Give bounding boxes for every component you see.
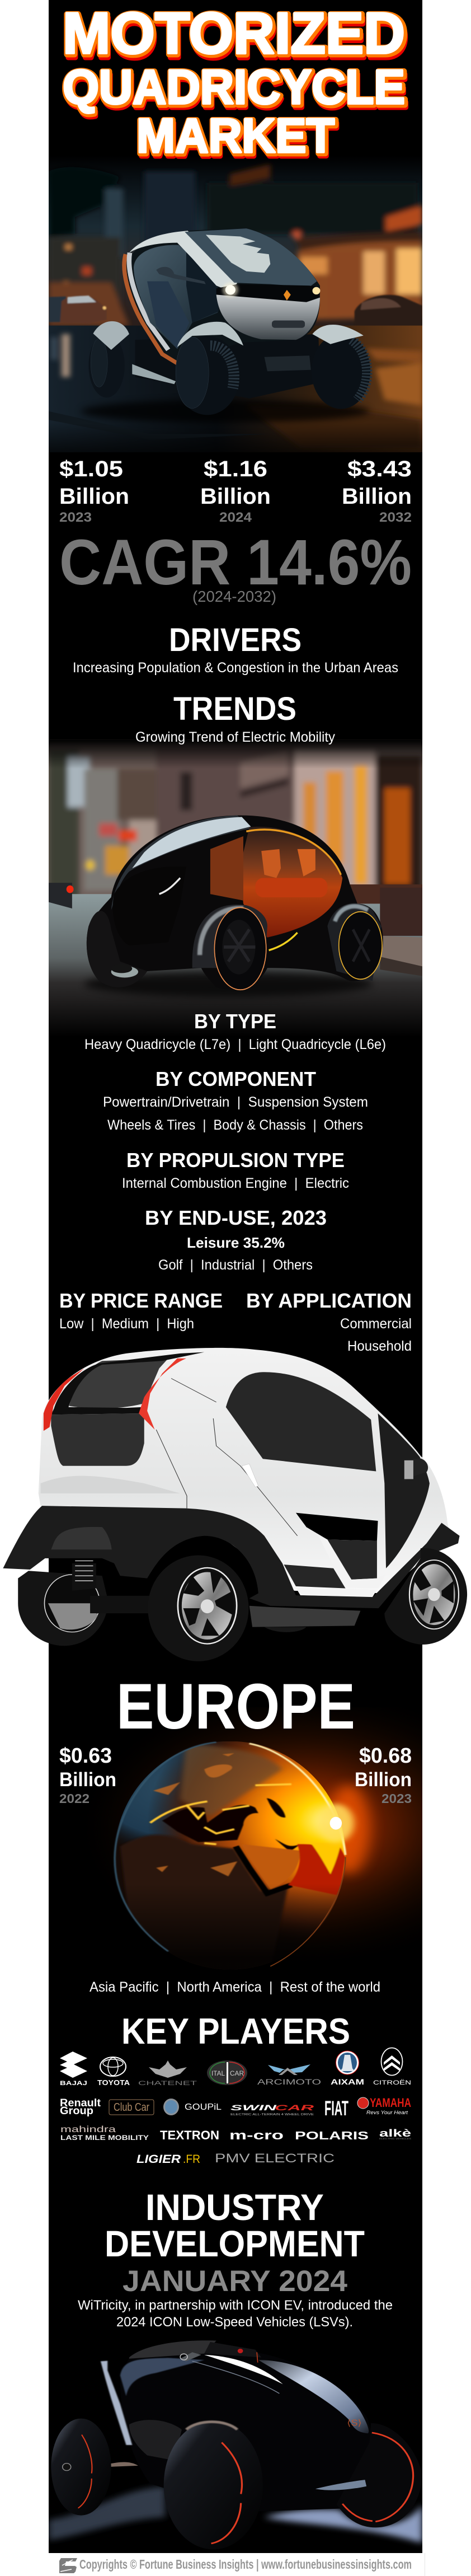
title line: MOTORIZED: MOTORIZED — [63, 1, 405, 66]
logo: Ital Car: ITAL — [211, 2069, 225, 2077]
logo: Ital Car: CAR — [230, 2069, 244, 2077]
stat: 2032 market size: 2032 — [379, 510, 412, 525]
logo: Fiat: FIAT — [324, 2097, 348, 2120]
stat: 2024 market size: Billion — [200, 484, 271, 509]
stat: Europe 2023: 2023 — [381, 1791, 412, 1806]
segment: by type — [84, 1010, 386, 1052]
development description: WiTricity, in partnership with ICON EV, introduced the — [78, 2298, 393, 2313]
stat: Europe 2022: $0.63 — [59, 1744, 112, 1768]
footer — [49, 2553, 425, 2576]
logo: Mahindra Last Mile Mobility: mahindra — [60, 2125, 116, 2134]
heading: leading region Europe: EUROPE — [116, 1671, 355, 1743]
stat: Europe 2023: Billion — [355, 1769, 412, 1791]
logo: Aixam — [331, 2051, 364, 2086]
stat: 2023 market size: Billion — [59, 484, 129, 509]
stat: Europe 2022: 2022 — [59, 1791, 90, 1806]
logo: Club Car: Club Car — [114, 2101, 149, 2114]
image: dark concept vehicle with red wheel rings: ⟨S⟩ — [347, 2418, 362, 2428]
logo: Chatenet — [138, 2060, 197, 2087]
segment: by component — [103, 1067, 368, 1133]
stat: Europe 2023 — [355, 1744, 412, 1806]
logo: Micro: m-cro — [229, 2128, 284, 2142]
logo: Goupil — [163, 2099, 222, 2115]
segment: by price range: BY PRICE RANGE — [59, 1289, 223, 1312]
logo: Alke: alkè — [379, 2128, 411, 2139]
CAGR period: (2024-2032) — [192, 588, 276, 605]
segment: by application — [246, 1289, 412, 1354]
title line: MARKET: MARKET — [138, 113, 337, 167]
logo: Textron: TEXTRON — [160, 2128, 219, 2142]
stat: Europe 2022: Billion — [59, 1769, 116, 1791]
logo: Ligier: .FR — [183, 2153, 200, 2166]
heading: key players: KEY PLAYERS — [121, 2011, 350, 2052]
title line: MARKET: MARKET — [137, 110, 336, 164]
segment: by propulsion type — [122, 1149, 349, 1191]
segment: by end-use: BY END-USE, 2023 — [145, 1206, 327, 1229]
logo: Club Car — [109, 2100, 154, 2115]
logo: Swincar — [230, 2103, 315, 2116]
title line: MARKET: MARKET — [136, 109, 335, 163]
development description — [78, 2298, 393, 2330]
wheels — [87, 911, 147, 987]
logo: Ital Car — [207, 2060, 247, 2085]
logo: Yamaha: YAMAHA — [370, 2096, 411, 2110]
logo: Yamaha: Revs Your Heart — [366, 2110, 408, 2115]
segment: by application: BY APPLICATION — [246, 1289, 412, 1312]
logo: Alke — [379, 2128, 411, 2140]
stat: 2032 market size: Billion — [342, 484, 412, 509]
segment: by propulsion type: BY PROPULSION TYPE — [126, 1149, 345, 1172]
logo: PMV Electric: PMV ELECTRIC — [215, 2151, 335, 2165]
image: dark concept vehicle with red wheel rings — [49, 2340, 422, 2549]
logo: Swincar: SWIN — [230, 2103, 277, 2112]
hero image: quadricycle on rainy night street — [49, 156, 422, 466]
segment: by component: Powertrain/Drivetrain | Suspension System — [103, 1094, 368, 1110]
stat: Europe 2023: $0.68 — [359, 1744, 412, 1768]
segment: by type: Heavy Quadricycle (L7e) | Light Quadricycle (L6e) — [84, 1037, 386, 1052]
stat: 2023 market size — [59, 457, 129, 525]
development date: JANUARY 2024 — [123, 2265, 348, 2298]
logo: Ligier: LIGIER — [136, 2153, 181, 2166]
logo: Polaris: POLARIS — [295, 2130, 369, 2142]
logo: Bajaj — [60, 2052, 87, 2087]
title line: MOTORIZED: MOTORIZED — [63, 2, 407, 67]
other regions: Asia Pacific | North America | Rest of the world — [90, 1979, 380, 1995]
segment: by price range: Low | Medium | High — [59, 1316, 194, 1332]
logo: Bajaj: BAJAJ — [60, 2080, 87, 2087]
heading: trends: TRENDS — [173, 691, 296, 727]
logo: Mahindra Last Mile Mobility — [60, 2125, 149, 2142]
logo: Toyota: TOYOTA — [97, 2078, 130, 2087]
trends text: Growing Trend of Electric Mobility — [135, 729, 335, 745]
key player logos — [60, 2048, 411, 2166]
stat: 2023 market size: 2023 — [59, 510, 92, 525]
icon: Fortune Business Insights logo — [59, 2558, 77, 2573]
stat: 2023 market size: $1.05 — [59, 457, 123, 481]
heading: drivers: DRIVERS — [169, 622, 302, 658]
title line: QUADRICYCLE: QUADRICYCLE — [63, 60, 405, 114]
logo: Alke: ELECTRIC VEHICLES — [379, 2137, 411, 2140]
title line: QUADRICYCLE: QUADRICYCLE — [63, 62, 407, 115]
segment: by end-use: Leisure 35.2% — [187, 1234, 285, 1251]
heading: industry development: DEVELOPMENT — [105, 2223, 365, 2264]
logo: Renault Group — [60, 2097, 101, 2117]
image: black and orange quadricycle on city street — [49, 740, 422, 1037]
stat: 2024 market size: $1.16 — [204, 457, 267, 481]
logo: Arcimoto — [257, 2064, 321, 2086]
title line: MOTORIZED: MOTORIZED — [64, 6, 408, 71]
title — [63, 1, 408, 167]
logo: Toyota — [97, 2057, 130, 2087]
logo: Swincar: ELECTRIC ALL-TERRAIN 4 WHEEL DRIVE — [230, 2113, 314, 2116]
main car — [81, 228, 370, 423]
logo: Mahindra Last Mile Mobility: LAST MILE MOBILITY — [60, 2134, 149, 2142]
logo: Renault Group: Renault — [60, 2097, 101, 2109]
segment: by application: Commercial — [340, 1316, 412, 1332]
stat: 2024 market size: 2024 — [219, 510, 252, 525]
logo: Swincar: CAR — [275, 2103, 315, 2112]
development description: 2024 ICON Low-Speed Vehicles (LSVs). — [116, 2315, 353, 2330]
logo: Citroen — [373, 2048, 411, 2086]
logo: Goupil: GOUPiL — [185, 2102, 222, 2112]
logo: Arcimoto: ARCIMOTO — [257, 2078, 321, 2086]
drivers text: Increasing Population & Congestion in the Urban Areas — [73, 660, 398, 676]
segment: by end-use — [145, 1206, 327, 1273]
black background panel — [49, 0, 422, 2553]
title line: QUADRICYCLE: QUADRICYCLE — [64, 64, 408, 118]
logo: Yamaha — [357, 2096, 411, 2115]
segment: by component: BY COMPONENT — [156, 1067, 316, 1090]
segment: by propulsion type: Internal Combustion Engine | Electric — [122, 1175, 349, 1191]
stat: Europe 2022 — [59, 1744, 116, 1806]
segment: by end-use: Golf | Industrial | Others — [158, 1257, 313, 1273]
segment: by type: BY TYPE — [194, 1010, 276, 1033]
stat: 2032 market size — [342, 457, 412, 525]
stat: 2032 market size: $3.43 — [347, 457, 412, 481]
heading: industry development: INDUSTRY — [145, 2186, 324, 2228]
logo: Citroen: CITROËN — [373, 2079, 411, 2086]
stat: 2024 market size — [200, 457, 271, 525]
car — [84, 816, 383, 997]
heading: industry development — [105, 2186, 365, 2264]
logo: Renault Group: Group — [60, 2105, 93, 2117]
logo: Ligier — [136, 2153, 200, 2166]
segment: by price range — [59, 1289, 223, 1332]
image: glowing globe centred on Europe — [113, 1713, 422, 1969]
segment: by component: Wheels & Tires | Body & Chassis | Others — [107, 1117, 363, 1133]
logo: Aixam: AIXAM — [331, 2077, 364, 2086]
logo: Chatenet: CHATENET — [138, 2080, 197, 2087]
segment: by application: Household — [347, 1338, 412, 1354]
CAGR headline: CAGR 14.6% — [59, 527, 412, 598]
image: white quadricycle rear three-quarter view — [3, 1348, 467, 1661]
